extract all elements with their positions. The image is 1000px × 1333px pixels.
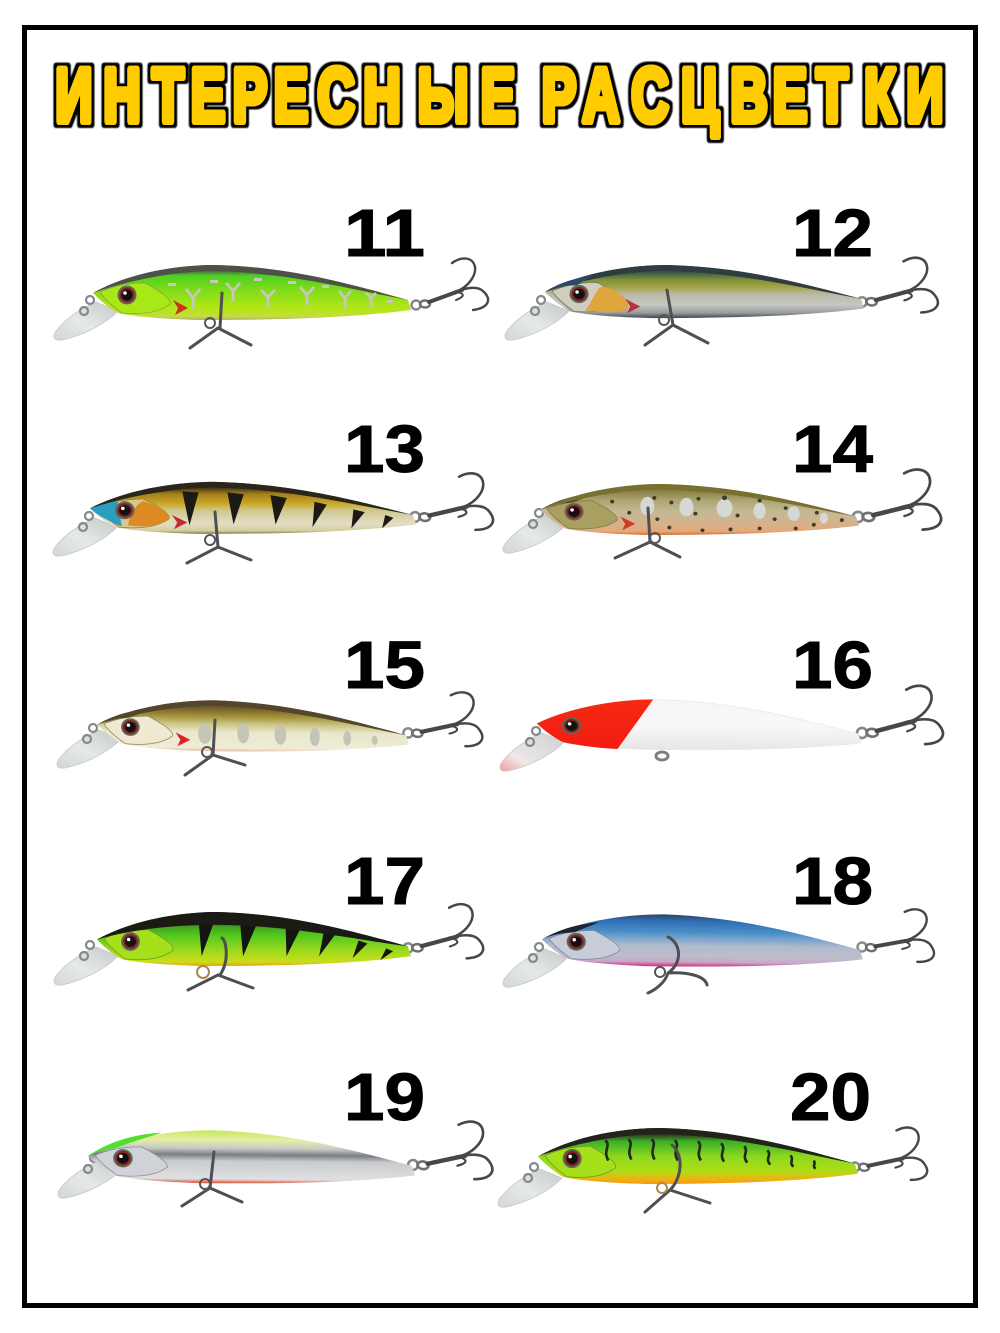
- lure 15: brown back, cream belly with grey ovals: [57, 685, 488, 775]
- number 14: 14: [792, 412, 873, 487]
- lure 16: white body, red head: [500, 681, 947, 771]
- number 17: 17: [344, 844, 425, 919]
- lure 11: green with silver Y marks: [54, 258, 488, 348]
- lure 17: fire tiger with black bars: [54, 899, 487, 990]
- number 18: 18: [792, 844, 873, 919]
- lure 20: green tiger with dark squiggles: [498, 1120, 933, 1212]
- belly hook eye: [656, 752, 668, 760]
- lure 14: brown trout with spots: [503, 463, 946, 558]
- title: ИНТЕРЕСНЫЕ РАСЦВЕТКИ: РАСЦВЕТКИ: [542, 53, 944, 138]
- lure 18: blue back, silver sides, pink belly: [503, 900, 941, 993]
- title: ИНТЕРЕСНЫЕ РАСЦВЕТКИ: ИНТЕРЕСНЫЕ: [55, 53, 515, 138]
- lure 19: lime back, silver sides, red belly: [58, 1114, 499, 1206]
- number 16: 16: [792, 628, 873, 703]
- number 12: 12: [792, 196, 873, 271]
- lure 13: gold perch with black bars: [53, 467, 498, 563]
- number 20: 20: [790, 1060, 871, 1135]
- title: ИНТЕРЕСНЫЕ РАСЦВЕТКИ: [55, 53, 944, 138]
- lure 12: olive and silver: [505, 253, 942, 345]
- number 13: 13: [344, 412, 425, 487]
- number 11: 11: [344, 196, 425, 271]
- number 15: 15: [344, 628, 425, 703]
- number 19: 19: [344, 1060, 425, 1135]
